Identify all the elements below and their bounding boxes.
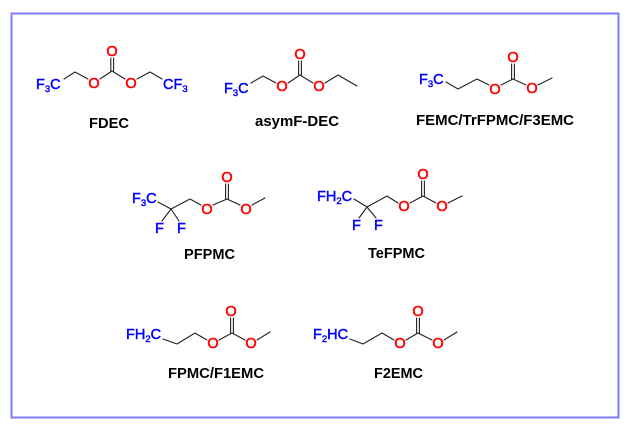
molecule: PFPMC: F: [155, 221, 164, 237]
label: PFPMC: PFPMC: [184, 247, 236, 263]
molecule: PFPMC: C: [146, 191, 157, 207]
molecule: FPMC/F1EMC: [126, 304, 270, 382]
molecule: TeFPMC: [317, 167, 462, 262]
molecule: FPMC/F1EMC: O: [225, 304, 237, 320]
molecule: FEMC/TrFPMC/F3EMC: F: [419, 72, 428, 88]
molecule: FEMC/TrFPMC/F3EMC: O: [526, 81, 538, 97]
molecule: FDEC: 3: [182, 84, 188, 95]
molecule: FDEC: [36, 44, 188, 132]
molecule: PFPMC: F: [177, 221, 186, 237]
molecule: FDEC: CF: [163, 77, 182, 93]
molecule: FDEC: F: [36, 77, 45, 93]
molecule: F2EMC: 2: [322, 334, 327, 345]
molecule: asymF-DEC: O: [276, 79, 288, 95]
molecule: FPMC/F1EMC: FH: [126, 327, 145, 343]
molecule: TeFPMC: 2: [336, 196, 342, 207]
molecule: PFPMC: O: [201, 202, 213, 218]
molecule: TeFPMC: O: [417, 167, 429, 183]
molecule: F2EMC: O: [432, 336, 444, 352]
molecule: PFPMC: F: [132, 191, 141, 207]
molecule: FDEC: O: [125, 76, 137, 92]
molecule: TeFPMC: F: [352, 218, 361, 234]
molecule: TeFPMC: F: [374, 218, 383, 234]
molecule: FDEC: 3: [45, 84, 50, 95]
molecule: FPMC/F1EMC: O: [245, 336, 257, 352]
label: FPMC/F1EMC: FPMC/F1EMC: [168, 366, 265, 382]
molecule: F2EMC: F: [313, 327, 322, 343]
molecule: FEMC/TrFPMC/F3EMC: O: [507, 50, 519, 66]
molecule: FDEC: C: [50, 77, 61, 93]
molecule: FEMC/TrFPMC/F3EMC: O: [489, 82, 501, 98]
label: FDEC: FDEC: [89, 116, 130, 132]
molecule: FEMC/TrFPMC/F3EMC: 3: [428, 79, 433, 90]
molecule: asymF-DEC: C: [238, 81, 249, 97]
label: F2EMC: F2EMC: [374, 366, 424, 382]
molecule: asymF-DEC: O: [313, 79, 325, 95]
molecule: TeFPMC: C: [342, 189, 352, 205]
molecule: FDEC: O: [106, 44, 118, 60]
molecule: FDEC: O: [88, 76, 100, 92]
label: TeFPMC: TeFPMC: [368, 246, 426, 262]
molecule: F2EMC: HC: [327, 327, 348, 343]
label: asymF-DEC: asymF-DEC: [255, 114, 340, 130]
molecule: FPMC/F1EMC: O: [207, 336, 219, 352]
label: FEMC/TrFPMC/F3EMC: FEMC/TrFPMC/F3EMC: [416, 113, 575, 129]
molecule: F2EMC: [313, 304, 457, 382]
molecule: PFPMC: O: [221, 170, 233, 186]
molecule: PFPMC: 3: [141, 198, 146, 209]
molecule: FPMC/F1EMC: 2: [145, 334, 151, 345]
molecule: TeFPMC: O: [398, 199, 410, 215]
molecule: FPMC/F1EMC: C: [151, 327, 161, 343]
molecule: asymF-DEC: [224, 47, 357, 130]
molecule: TeFPMC: O: [436, 199, 448, 215]
molecule: asymF-DEC: O: [294, 47, 306, 63]
molecule: TeFPMC: FH: [317, 189, 336, 205]
molecule: asymF-DEC: F: [224, 81, 233, 97]
molecule: PFPMC: [132, 170, 265, 263]
molecule: FEMC/TrFPMC/F3EMC: C: [433, 72, 444, 88]
molecule: FEMC/TrFPMC/F3EMC: [416, 50, 575, 129]
molecule: PFPMC: O: [240, 202, 252, 218]
molecule: asymF-DEC: 3: [233, 88, 238, 99]
molecule: F2EMC: O: [412, 304, 424, 320]
molecule: F2EMC: O: [394, 336, 406, 352]
